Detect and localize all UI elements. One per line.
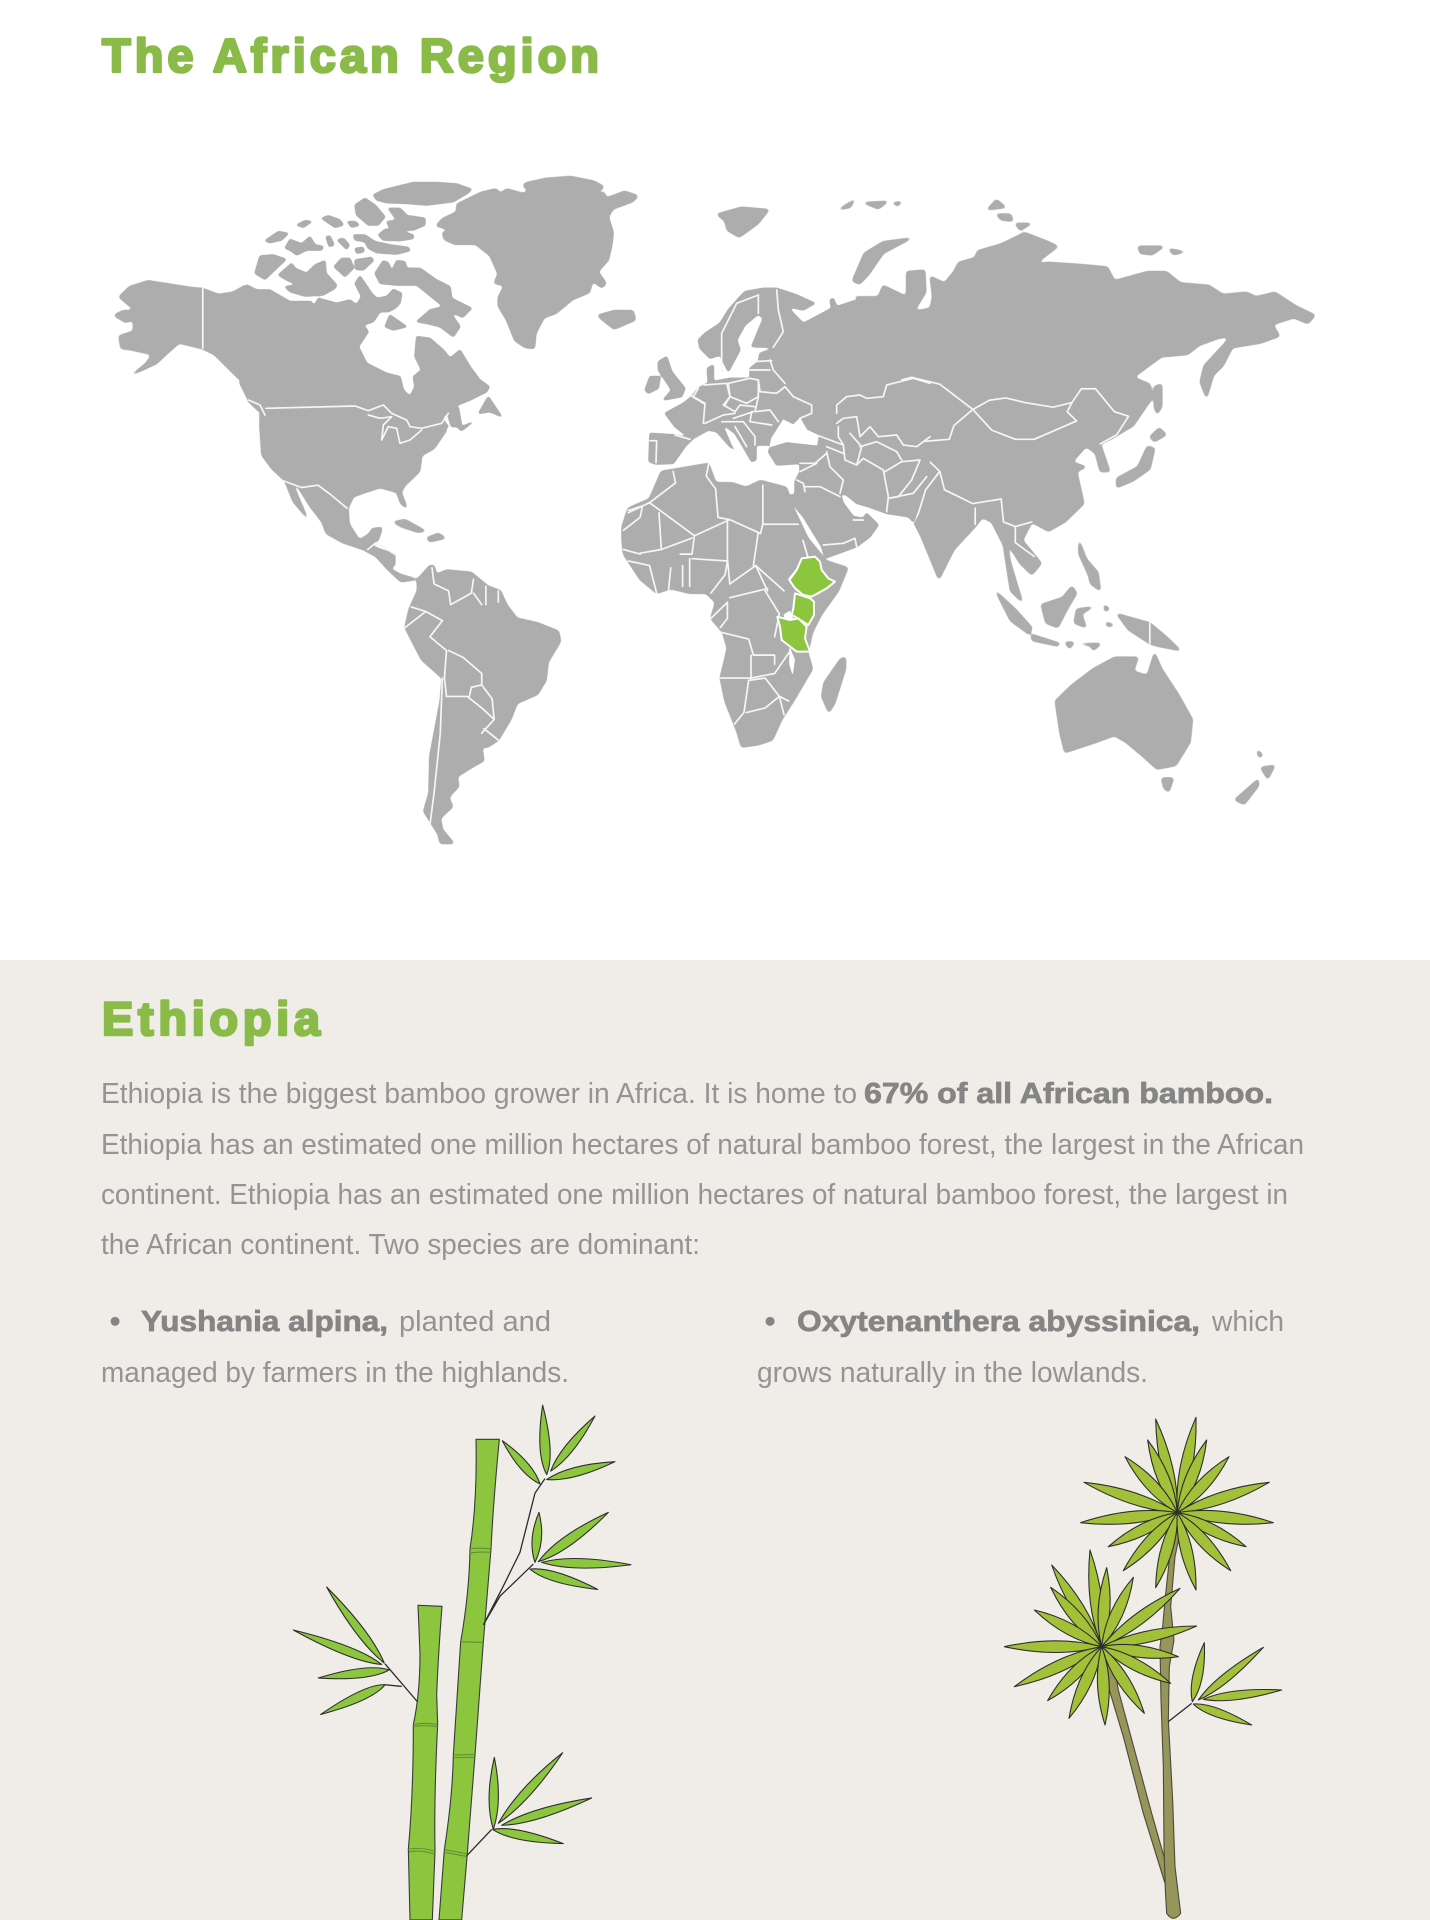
map: highlighted countries (Ethiopia, Kenya, Tanzania) [777,557,835,652]
bullet: Yushania alpina [101,1306,569,1389]
text block: Ethiopia description: 67% of all African bamboo. [864,1078,1273,1110]
illustration: Yushania alpina bamboo [293,1405,631,1920]
text block: Ethiopia description: continent. Ethiopia has an estimated one million hectares of natural bamboo forest, the largest in [101,1179,1288,1211]
bullet: Oxytenanthera abyssinica: • [765,1306,775,1338]
text block: Ethiopia description: Ethiopia has an estimated one million hectares of natural bamboo forest, the largest in the African [101,1129,1304,1161]
text block: Ethiopia description: the African continent. Two species are dominant: [101,1229,700,1261]
heading: Ethiopia: Ethiopia [102,992,321,1045]
map: Canada and Arctic islands [240,183,502,443]
bullet: Yushania alpina: planted and [399,1306,551,1338]
illustration: Oxytenanthera abyssinica bamboo [1004,1417,1282,1918]
text block: Ethiopia description [101,1078,1304,1261]
map: Americas and Greenland [114,177,638,843]
bullet: Yushania alpina: managed by farmers in the highlands. [101,1357,569,1389]
bullet: Yushania alpina: • [110,1306,120,1338]
bullet: Oxytenanthera abyssinica: Oxytenanthera abyssinica, [797,1306,1200,1338]
title: The African Region: The African Region [102,29,599,82]
bullet: Yushania alpina: Yushania alpina, [141,1306,388,1338]
text block: Ethiopia description: Ethiopia is the biggest bamboo grower in Africa. It is home to [101,1078,857,1110]
bullet: Oxytenanthera abyssinica: grows naturally in the lowlands. [757,1357,1148,1389]
panel: Ethiopia background [0,960,1430,1920]
map: Eurasia, Africa, Oceania [598,200,1315,804]
bullet: Oxytenanthera abyssinica: which [1211,1306,1284,1338]
map: Europe and Western Asia [645,288,930,558]
world map [114,177,1315,843]
bullet: Oxytenanthera abyssinica [757,1306,1284,1389]
